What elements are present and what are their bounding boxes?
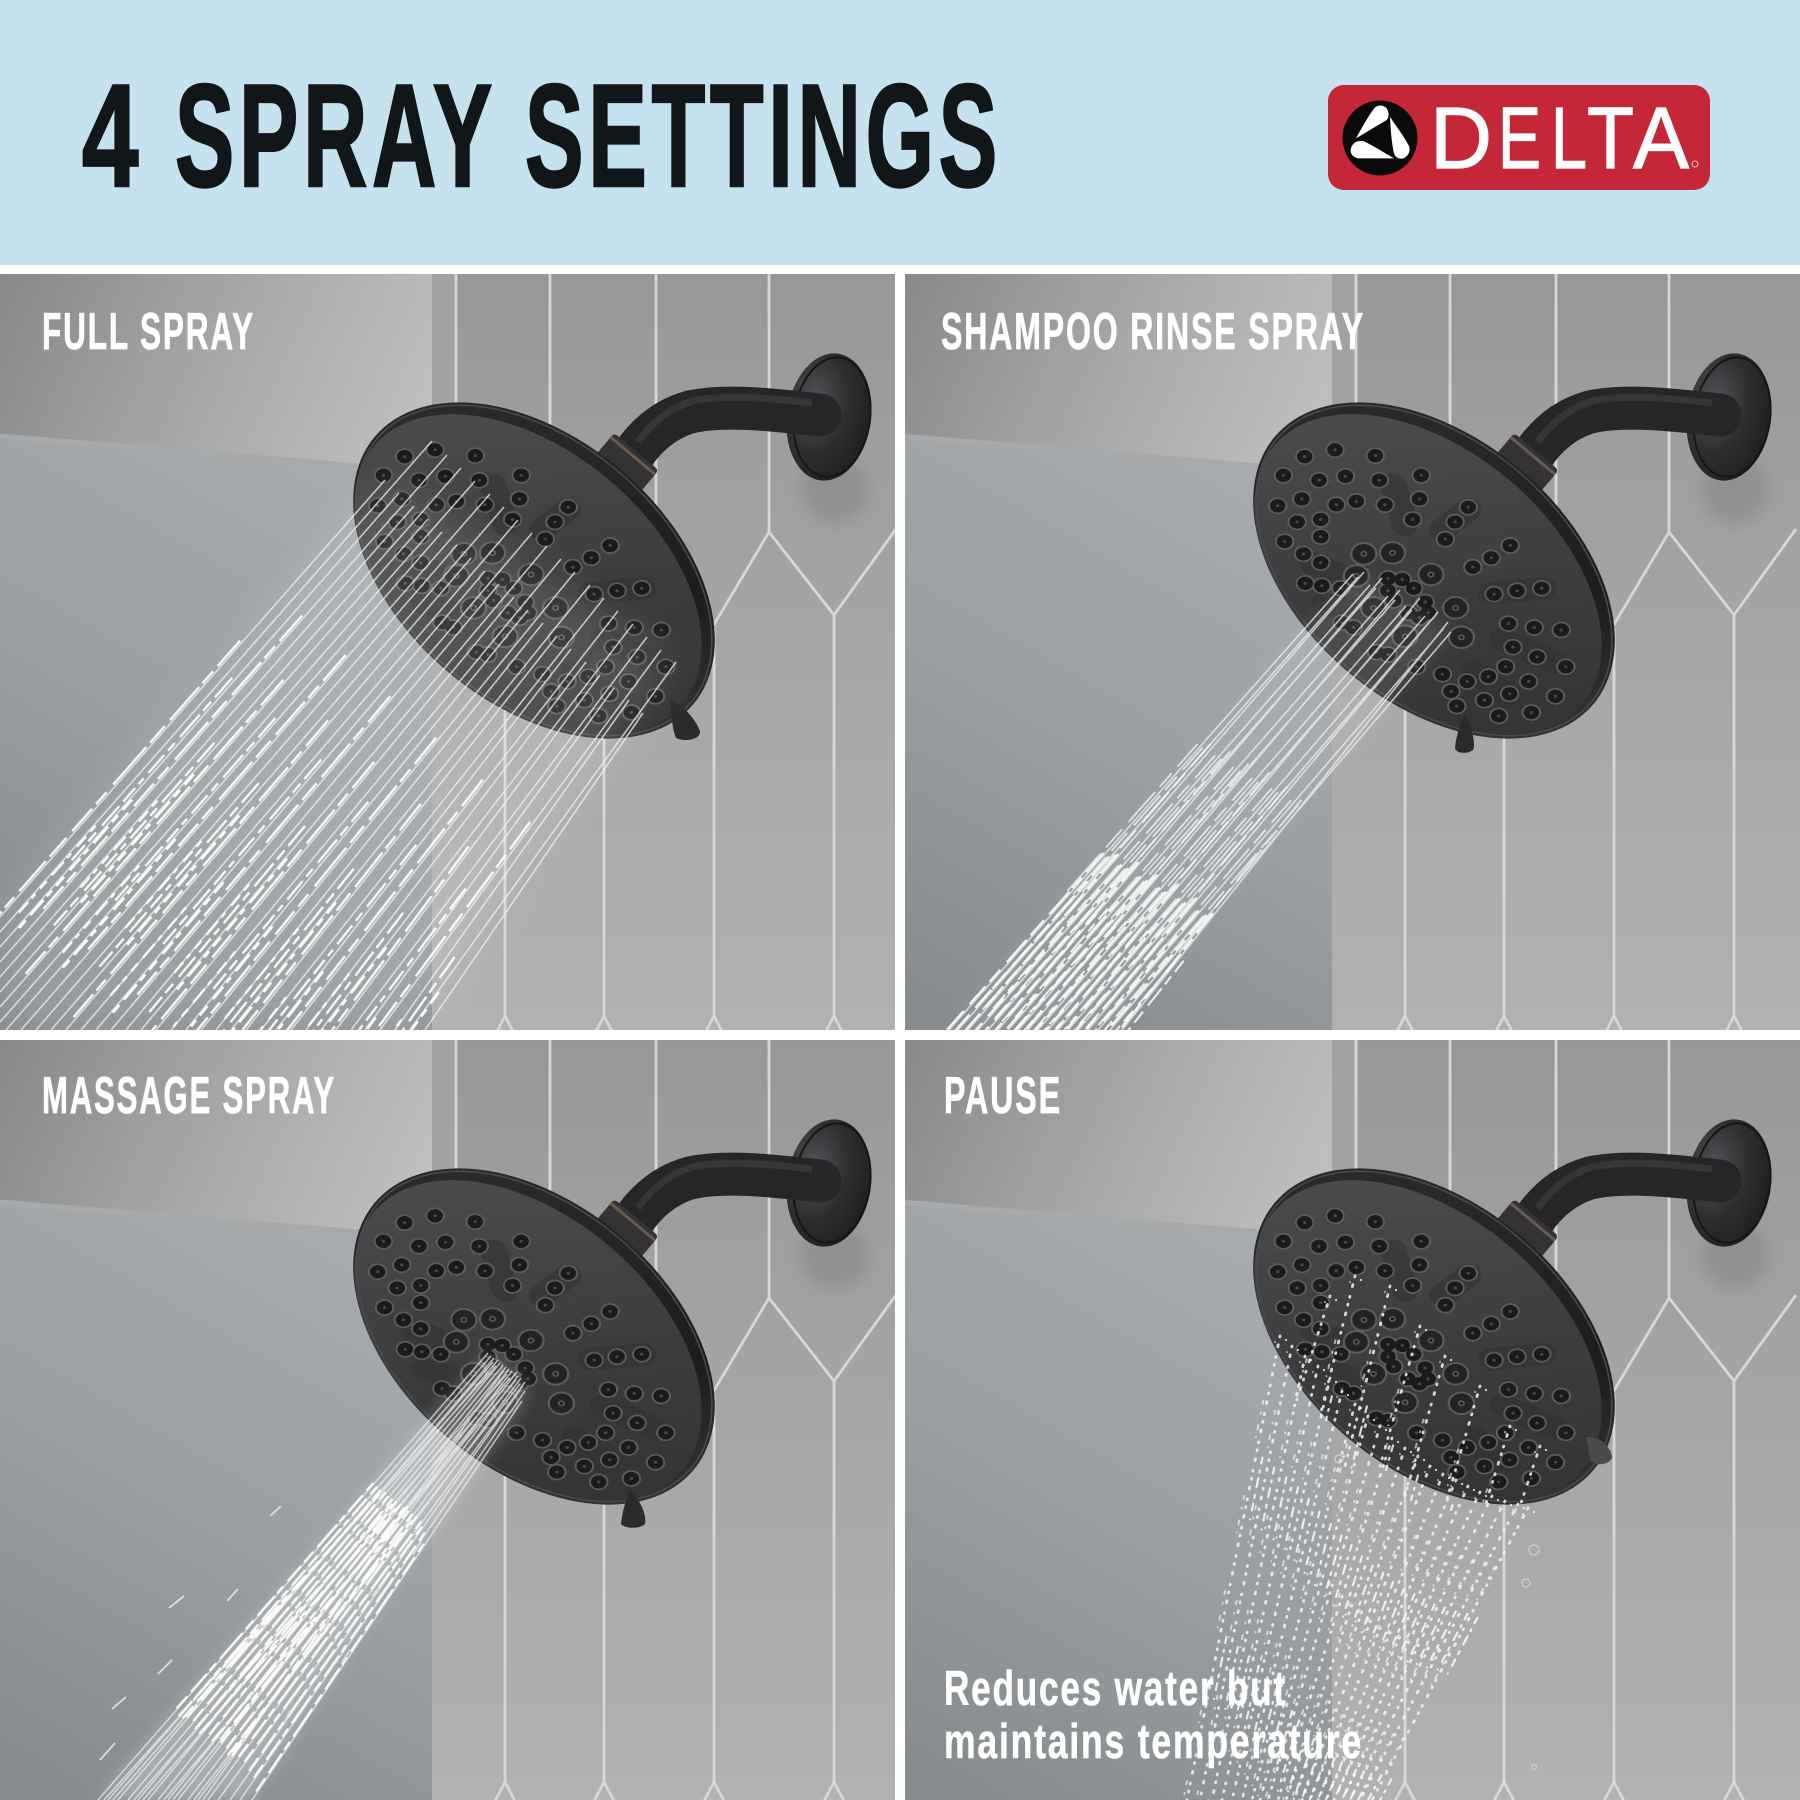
title: SETTINGS xyxy=(525,54,1002,217)
scene group: pause xyxy=(900,1036,1800,1800)
Delta logo: A xyxy=(1633,90,1689,187)
panel: pause xyxy=(900,1036,1800,1800)
label: massage spray: MASSAGE SPRAY xyxy=(42,1067,336,1125)
caption: pause description: maintains temperature xyxy=(944,1715,1363,1769)
Delta logo: T xyxy=(1587,90,1634,187)
caption: pause description: Reduces water but xyxy=(944,1662,1287,1716)
label: full spray: FULL SPRAY xyxy=(42,303,255,361)
title: 4 xyxy=(82,54,144,217)
water: full spray xyxy=(0,441,676,1038)
header band xyxy=(0,0,1800,265)
Delta logo: E xyxy=(1498,90,1541,187)
caption: pause description xyxy=(944,1662,1363,1769)
scene group: shampoo rinse xyxy=(900,270,1800,1056)
Delta logo: D xyxy=(1430,90,1492,187)
Delta logo: L xyxy=(1551,90,1587,187)
shower head: full spray xyxy=(353,353,872,739)
panel: massage spray xyxy=(0,1036,912,1800)
panel: shampoo rinse spray xyxy=(900,270,1800,1056)
title: SPRAY xyxy=(175,54,497,217)
scene group: massage xyxy=(0,1036,912,1800)
spray lever: full spray xyxy=(670,700,700,740)
label: shampoo rinse spray: SHAMPOO RINSE SPRAY xyxy=(941,303,1365,361)
Delta logo xyxy=(1328,85,1710,190)
label: pause: PAUSE xyxy=(944,1067,1062,1125)
panel: full spray xyxy=(0,270,912,1056)
